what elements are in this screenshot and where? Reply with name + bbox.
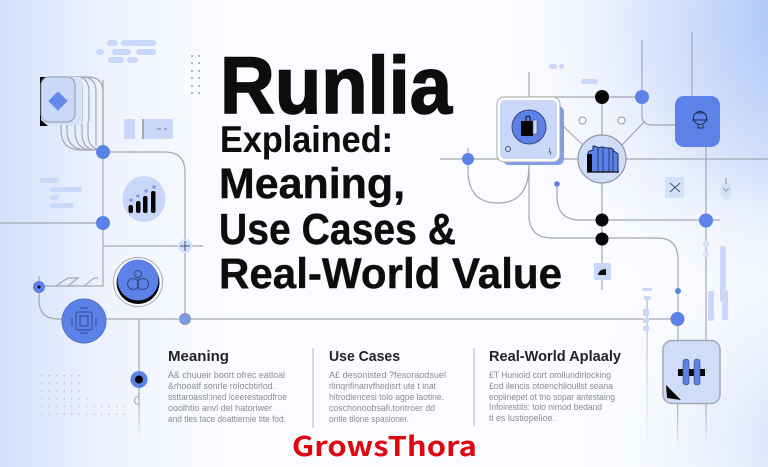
icon: building chart circle [578,135,626,183]
column: real-world: £od ilencis otoenchlioullst seana [489,381,613,391]
column: use cases: Use Cases [329,348,400,365]
left nodes [33,145,192,324]
icon: x square [665,177,684,198]
column: use cases [329,348,446,424]
right nodes [462,90,713,326]
icon: shield [720,178,732,200]
dividers [312,348,475,428]
column: real-world: ti es lustiopelioe. [489,413,555,423]
title [219,41,562,298]
brand: GrowsThora: GrowsThora [292,425,477,464]
column: real-world [489,348,622,423]
column: meaning [168,348,287,424]
light accents top right [549,64,728,86]
column: meaning: ooolhtio anvl del hatoriwer [168,403,272,413]
column: use cases: coschonoobsafi.toritroer dd [329,403,435,413]
column: meaning: ssttaroassl:ined lceerestaodfroe [168,392,287,402]
column: real-world: £T Hunioid cort orollundirlocking [489,370,611,380]
title: Explained: [220,119,393,160]
column: meaning: A& chuueir boort ofrec eatloal [168,370,285,380]
icon: connector card [663,340,720,404]
column: real-world: eopiinepet ot tno sopar antestaing [489,392,615,402]
column: use cases: rlinqrifinanvfhedisrt ute t inat [329,381,436,391]
column: meaning: Meaning [168,348,229,365]
bottom left node [130,371,148,404]
icon: shopping bag card [497,97,564,165]
column: meaning: and tles tace doattiernie tite fod. [168,414,286,424]
icon: bar chart circle [122,176,166,222]
small cards with dash [124,119,173,139]
column: use cases: ontle tilone spasloner. [329,414,409,424]
title: Meaning, [219,160,405,208]
icon: people circle [114,258,162,306]
title: Real-World Value [219,250,562,298]
title: Runlia [220,41,453,131]
column: real-world: Infoirestits: tolo nimod bedand [489,402,602,412]
column: meaning: &rhooatf sonrle rolocbtirlod. [168,381,275,391]
title: Use Cases & [219,205,456,254]
column: use cases: A£ desonisted ?fesoraodsuel [329,370,446,380]
dot grid bottom left [40,374,131,420]
icon: stacked cards top left [40,77,103,150]
decorative pills top left [40,40,156,208]
column: real-world: Real-World Aplaaly [489,348,622,365]
dot grid top [191,55,200,94]
icon: small square [594,263,611,280]
column: use cases: hitrodiencesi tolo agpe laotine. [329,392,444,402]
icon: robot square [675,96,720,147]
icon: chip circle [62,299,106,343]
light accents lower right [642,240,728,331]
